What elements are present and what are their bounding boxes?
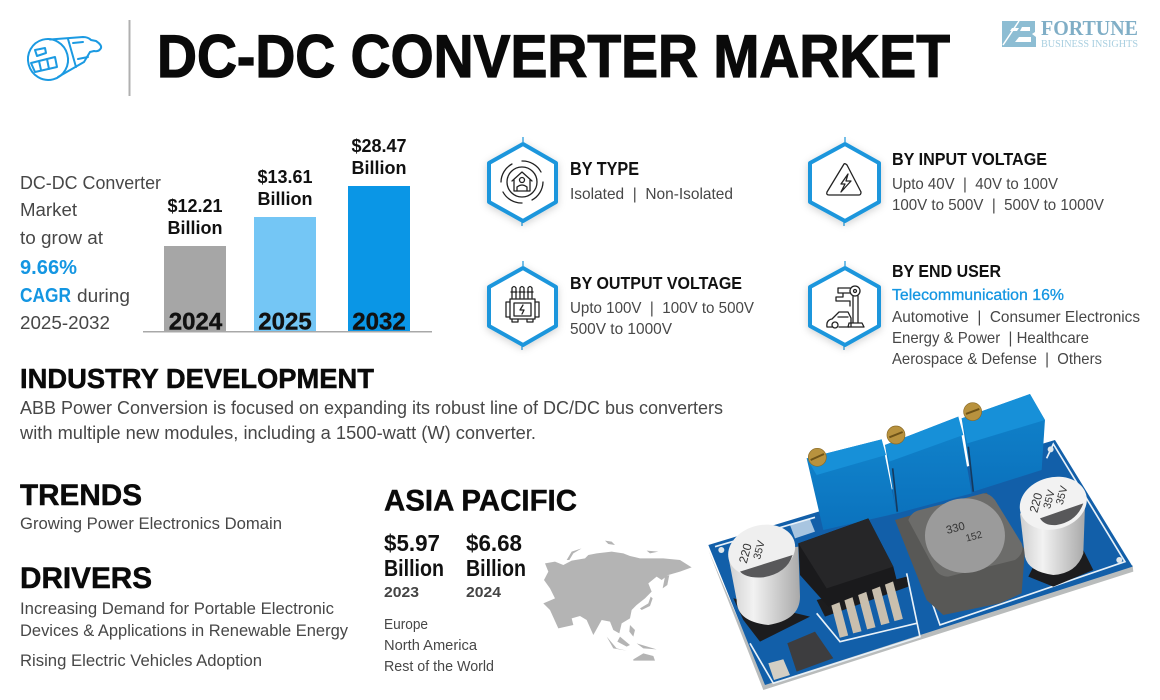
bar: 2032 xyxy=(348,136,410,336)
stat: 2023: Billion xyxy=(384,555,444,581)
body text: with multiple new modules, including a 1500-watt (W) converter. xyxy=(19,423,536,443)
options: Upto 100V | 100V to 500V xyxy=(570,300,754,317)
body text: ABB Power Conversion is focused on expanding its robust line of DC/DC bus converters xyxy=(20,398,723,418)
panel: asia pacific xyxy=(384,484,577,675)
options: Upto 40V | 40V to 100V xyxy=(892,176,1058,193)
options: Energy & Power | Healthcare xyxy=(892,330,1089,347)
options xyxy=(570,300,754,338)
stat: 2023 xyxy=(384,530,444,601)
text block: growth summary: during xyxy=(77,286,130,306)
stat: 2023: $5.97 xyxy=(384,530,440,556)
bar: 2024: 2024 xyxy=(169,308,223,336)
right capacitor xyxy=(1014,469,1093,587)
right capacitor: 35V xyxy=(1041,488,1058,510)
highlighted segment: Telecommunication 16% xyxy=(892,287,1064,304)
options xyxy=(892,176,1104,214)
image: DC-DC converter circuit board xyxy=(708,394,1133,690)
heading: BY INPUT VOLTAGE xyxy=(892,149,1047,169)
body text: Increasing Demand for Portable Electronic xyxy=(20,599,334,618)
left capacitor xyxy=(722,517,810,642)
small diode xyxy=(787,632,833,672)
heading: BY OUTPUT VOLTAGE xyxy=(570,273,742,293)
bar: 2032: Billion xyxy=(352,158,406,178)
panel: industry development xyxy=(19,363,723,443)
inductor: 152 xyxy=(965,529,984,545)
options: Isolated | Non-Isolated xyxy=(570,186,733,203)
body text: Growing Power Electronics Domain xyxy=(20,514,282,533)
icon: transformer xyxy=(489,261,556,350)
heading: INDUSTRY DEVELOPMENT xyxy=(20,363,374,394)
divider xyxy=(128,20,130,96)
icon: house in circle xyxy=(489,137,556,226)
inductor: 330 xyxy=(945,520,966,537)
heading: DRIVERS xyxy=(20,562,152,595)
stat: 2023: 2023 xyxy=(384,584,419,601)
panel: by end user xyxy=(810,261,1140,368)
text block: growth summary: to grow at xyxy=(20,228,103,248)
panel: drivers xyxy=(20,562,348,670)
icon: robot arm and car xyxy=(810,261,879,350)
icon: car charger xyxy=(23,35,101,84)
icon: high voltage warning xyxy=(810,137,879,226)
stat: 2024: Billion xyxy=(466,555,526,581)
right capacitor: 35V xyxy=(1054,484,1071,506)
logo: Fortune Business Insights: FORTUNE xyxy=(1041,16,1138,40)
inductor xyxy=(895,493,1025,615)
stat: 2024: 2024 xyxy=(466,584,502,601)
text block: growth summary xyxy=(20,173,161,333)
title: DC-DC CONVERTER MARKET xyxy=(157,23,950,90)
bar chart: market size xyxy=(143,136,432,336)
options: 100V to 500V | 500V to 1000V xyxy=(892,197,1104,214)
right capacitor: 220 xyxy=(1027,491,1045,514)
panel: by input voltage xyxy=(810,137,1104,226)
panel: by type xyxy=(489,137,733,226)
bar: 2025: Billion xyxy=(258,189,312,209)
heading: BY END USER xyxy=(892,261,1001,281)
bar: 2024 xyxy=(164,196,226,336)
bar: 2024: Billion xyxy=(168,218,222,238)
trimmer potentiometers xyxy=(807,394,1045,530)
bar: 2025: 2025 xyxy=(258,308,312,336)
body text: Devices & Applications in Renewable Energy xyxy=(20,621,348,640)
other regions list xyxy=(384,616,494,675)
body text xyxy=(20,599,348,670)
bar: 2024: $12.21 xyxy=(167,196,223,216)
board xyxy=(708,440,1133,690)
panel: by output voltage xyxy=(489,261,754,350)
bar: 2025 xyxy=(254,167,316,336)
bar: 2025: $13.61 xyxy=(257,167,313,187)
options: Automotive | Consumer Electronics xyxy=(892,309,1140,326)
left capacitor: 35V xyxy=(751,538,768,561)
logo: Fortune Business Insights: BUSINESS INSIGHTS xyxy=(1041,39,1138,50)
body text xyxy=(19,398,723,443)
map: Asia Pacific xyxy=(543,541,692,661)
text block: growth summary: 2025-2032 xyxy=(20,313,110,333)
left capacitor: 220 xyxy=(736,541,755,565)
bar: 2032: 2032 xyxy=(352,308,406,336)
text block: growth summary: 9.66% xyxy=(20,257,77,279)
options: Aerospace & Defense | Others xyxy=(892,351,1102,368)
other regions list: Europe xyxy=(384,616,428,633)
options: 500V to 1000V xyxy=(570,321,672,338)
text block: growth summary: Market xyxy=(20,200,77,220)
text block: growth summary: CAGR xyxy=(20,285,71,307)
options xyxy=(892,309,1140,368)
stat: 2024 xyxy=(466,530,526,601)
stat: 2024: $6.68 xyxy=(466,530,522,556)
regulator chip xyxy=(798,518,908,637)
other regions list: North America xyxy=(384,637,478,654)
bar: 2032: $28.47 xyxy=(351,136,407,156)
heading: TRENDS xyxy=(20,479,142,512)
logo: Fortune Business Insights xyxy=(1002,16,1138,50)
panel: trends xyxy=(20,479,282,533)
heading: BY TYPE xyxy=(570,159,639,179)
other regions list: Rest of the World xyxy=(384,658,494,675)
text block: growth summary: DC-DC Converter xyxy=(20,173,161,193)
body text: Rising Electric Vehicles Adoption xyxy=(20,651,262,670)
heading: ASIA PACIFIC xyxy=(384,484,577,518)
